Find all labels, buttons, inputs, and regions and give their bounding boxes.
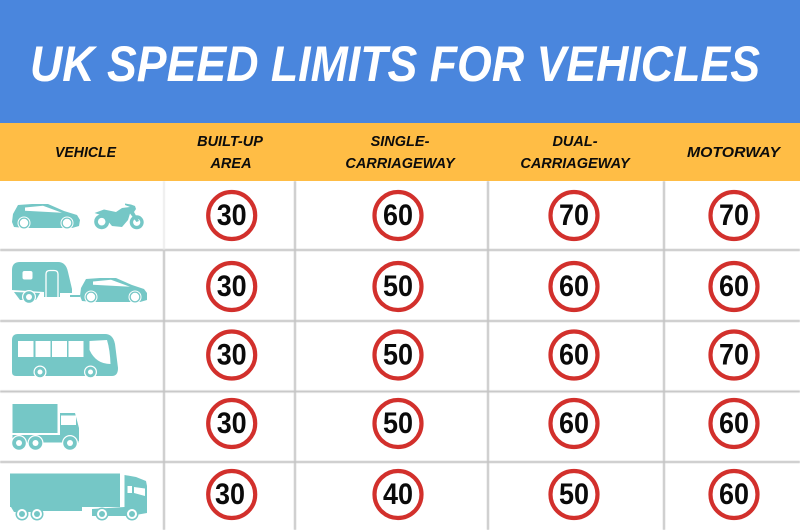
sign: 60: 60 (719, 270, 749, 303)
sign: 60: 60 (559, 270, 589, 303)
sign: 30: 30 (217, 338, 247, 372)
title banner (0, 0, 800, 123)
header: single-carriageway: CARRIAGEWAY (345, 156, 456, 172)
sign: 60: 60 (719, 478, 749, 511)
header: single-carriageway: SINGLE- (371, 134, 430, 150)
row 1 speed signs (208, 192, 757, 239)
sign: 50 (374, 332, 422, 378)
sign: 30 (208, 400, 255, 447)
sign: 60: 60 (559, 407, 589, 440)
sign: 30 (208, 192, 255, 239)
sign: 30: 30 (217, 407, 247, 440)
sign: 70: 70 (559, 199, 589, 232)
header: vehicle: VEHICLE (55, 145, 117, 161)
sign: 70: 70 (719, 338, 749, 372)
sign: 70 (710, 332, 758, 378)
sign: 60 (550, 400, 598, 447)
icon: caravan (12, 262, 80, 304)
icon: caravan and car (12, 262, 147, 304)
icon: rigid lorry (11, 404, 79, 451)
icon: bus (12, 334, 118, 378)
sign: 70 (550, 192, 598, 239)
sign: 50 (550, 471, 598, 518)
header: built-up area: AREA (209, 156, 252, 172)
sign: 60 (710, 263, 758, 310)
sign: 30 (208, 332, 255, 378)
header: built-up area: BUILT-UP (197, 134, 263, 150)
header: motorway: MOTORWAY (687, 145, 781, 161)
sign: 60 (710, 400, 758, 447)
header: dual-carriageway: DUAL- (552, 134, 598, 150)
sign: 40 (374, 471, 422, 518)
icon: motorbike (94, 204, 144, 229)
sign: 60 (550, 332, 598, 378)
sign: 50: 50 (383, 338, 413, 372)
sign: 60 (710, 471, 758, 518)
sign: 30 (208, 263, 255, 310)
sign: 70 (710, 192, 758, 239)
sign: 40: 40 (383, 478, 413, 511)
icon: car and motorbike (12, 204, 144, 230)
row 5 speed signs (208, 471, 757, 518)
table header row (0, 123, 800, 181)
sign: 50 (374, 263, 422, 310)
sign: 30 (208, 471, 255, 518)
sign: 60: 60 (383, 199, 413, 232)
sign: 30: 30 (217, 270, 247, 303)
icon: car towing (80, 278, 147, 304)
sign: 60 (550, 263, 598, 310)
sign: 50 (374, 400, 422, 447)
row 4 speed signs (208, 400, 757, 447)
sign: 30: 30 (215, 478, 245, 511)
icon: articulated lorry (10, 474, 147, 520)
sign: 50: 50 (383, 407, 413, 440)
icon: car (12, 204, 80, 230)
header: dual-carriageway: CARRIAGEWAY (520, 156, 631, 172)
sign: 50: 50 (559, 478, 589, 511)
row 3 speed signs (208, 332, 757, 378)
row 2 speed signs (208, 263, 757, 310)
sign: 30: 30 (217, 199, 247, 232)
sign: 60: 60 (719, 407, 749, 440)
sign: 70: 70 (719, 199, 749, 232)
sign: 60 (374, 192, 422, 239)
sign: 50: 50 (383, 270, 413, 303)
sign: 60: 60 (559, 338, 589, 372)
